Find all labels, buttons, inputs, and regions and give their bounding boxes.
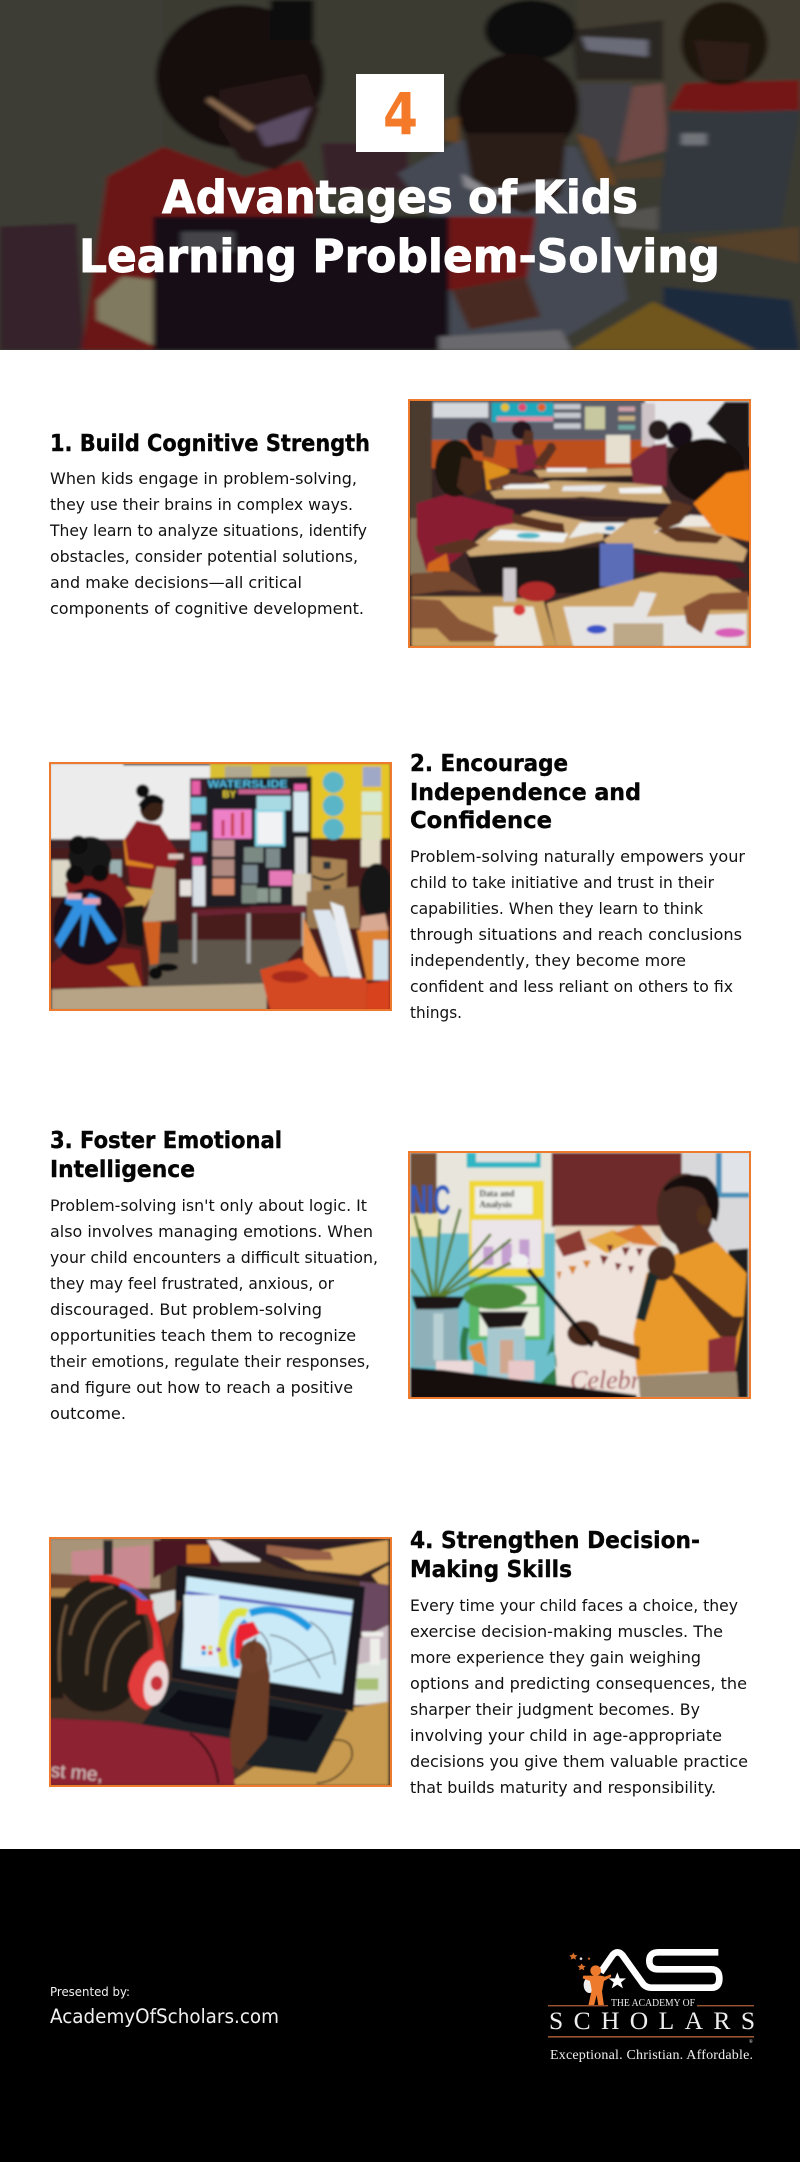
body text 3: outcome. <box>50 1404 126 1423</box>
heading 2: Independence and <box>410 778 641 806</box>
photo 4: child with headphones on a laptop <box>47 1535 397 1792</box>
photo 2: girl presenting science fair board: BY <box>222 790 237 801</box>
heading 2 <box>410 749 641 834</box>
body text 2: independently, they become more <box>410 951 686 970</box>
body text 4: decisions you give them valuable practice <box>410 1752 748 1771</box>
hero background photo: children at laptops, darkened <box>0 0 800 360</box>
body text 4: more experience they gain weighing <box>410 1648 701 1667</box>
body text 2: Problem-solving naturally empowers your <box>410 847 745 866</box>
section 1: build cognitive strength <box>49 397 757 653</box>
body text 2 <box>410 847 745 1022</box>
logo mark: AS monogram with orange child and stars <box>569 1952 719 2006</box>
body text 1: and make decisions—all critical <box>50 573 302 592</box>
heading 4: Making Skills <box>410 1555 572 1583</box>
body text 2: capabilities. When they learn to think <box>410 899 704 918</box>
photo 3: boy with microphone and pointer: Data and <box>479 1189 515 1199</box>
title: Advantages of Kids <box>162 171 638 224</box>
body text 3: your child encounters a difficult situation, <box>50 1248 378 1267</box>
heading 4: 4. Strengthen Decision- <box>410 1526 700 1554</box>
body text 3: discouraged. But problem-solving <box>50 1300 322 1319</box>
body text 3: opportunities teach them to recognize <box>50 1326 356 1345</box>
photo 3: boy with microphone and pointer: Analysis <box>479 1199 512 1209</box>
body text 1: obstacles, consider potential solutions, <box>50 547 358 566</box>
section 3: foster emotional intelligence <box>50 1126 757 1423</box>
presented by text <box>50 1984 279 2028</box>
heading 3: 3. Foster Emotional <box>50 1126 282 1154</box>
body text 4: that builds maturity and responsibility. <box>410 1778 716 1797</box>
heading 2: 2. Encourage <box>410 749 568 777</box>
photo 2: girl presenting science fair board <box>47 760 397 1017</box>
body text 1: When kids engage in problem-solving, <box>50 469 357 488</box>
number badge <box>356 74 444 152</box>
body text 3: Problem-solving isn't only about logic. It <box>50 1196 367 1215</box>
heading 3: Intelligence <box>50 1155 195 1183</box>
title <box>79 171 720 283</box>
body text 3: also involves managing emotions. When <box>50 1222 373 1241</box>
body text 4: involving your child in age-appropriate <box>410 1726 722 1745</box>
logo: The Academy of Scholars <box>548 1952 755 2063</box>
body text 2: things. <box>410 1003 462 1022</box>
logo wordmark: SCHOLARS <box>549 2006 755 2035</box>
body text 3: their emotions, regulate their responses, <box>50 1352 370 1371</box>
logo wordmark <box>549 1998 755 2063</box>
body text 3: they may feel frustrated, anxious, or <box>50 1274 334 1293</box>
body text 1 <box>49 469 367 618</box>
number badge: 4 <box>383 80 418 148</box>
body text 3 <box>50 1196 378 1423</box>
body text 1: They learn to analyze situations, identify <box>49 521 367 540</box>
photo 1: classroom with children painting at desks <box>407 397 757 653</box>
body text 2: through situations and reach conclusions <box>410 925 742 944</box>
presented by text: AcademyOfScholars.com <box>50 2005 279 2028</box>
presented by text: Presented by: <box>50 1984 130 1999</box>
title: Learning Problem-Solving <box>79 230 720 283</box>
body text 4: options and predicting consequences, the <box>410 1674 747 1693</box>
logo wordmark: THE ACADEMY OF <box>611 1998 695 2009</box>
body text 1: they use their brains in complex ways. <box>50 495 353 514</box>
heading 4 <box>410 1526 700 1583</box>
logo rules <box>548 2005 754 2038</box>
photo 3: boy with microphone and pointer <box>407 1150 757 1403</box>
body text 4: exercise decision-making muscles. The <box>410 1622 723 1641</box>
body text 2: confident and less reliant on others to fix <box>410 977 733 996</box>
heading 2: Confidence <box>410 806 552 834</box>
section 4: strengthen decision-making <box>47 1526 748 1797</box>
heading 3 <box>50 1126 282 1183</box>
body text 4: sharper their judgment becomes. By <box>410 1700 700 1719</box>
footer <box>0 1849 800 2162</box>
body text 4 <box>410 1596 748 1797</box>
body text 1: components of cognitive development. <box>50 599 364 618</box>
logo wordmark: ® <box>749 2039 753 2045</box>
photo 2: girl presenting science fair board: WATERSLIDE <box>208 779 288 791</box>
body text 2: child to take initiative and trust in their <box>410 873 714 892</box>
photo 3: boy with microphone and pointer: NIC <box>410 1176 451 1223</box>
body text 3: and figure out how to reach a positive <box>50 1378 353 1397</box>
photo 3: boy with microphone and pointer: Celebr <box>570 1365 642 1394</box>
hero banner <box>0 0 800 360</box>
photo 4: child with headphones on a laptop: st me, <box>50 1761 104 1786</box>
logo wordmark: Exceptional. Christian. Affordable. <box>550 2048 753 2063</box>
heading 1: 1. Build Cognitive Strength <box>50 429 370 457</box>
body text 4: Every time your child faces a choice, they <box>410 1596 738 1615</box>
section 2: encourage independence <box>47 749 745 1022</box>
